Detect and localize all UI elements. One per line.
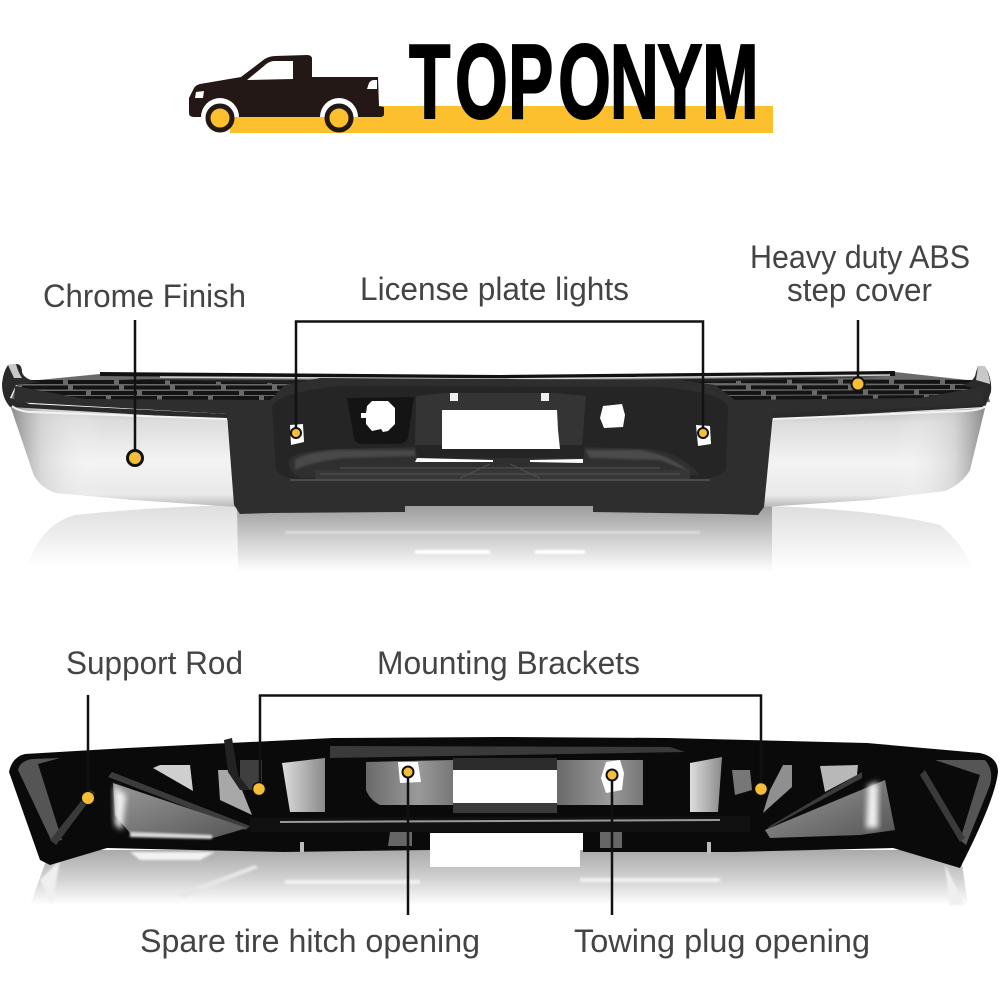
label: Heavy duty ABS step cover: Heavy duty ABS bbox=[750, 239, 970, 275]
cap rail right bbox=[768, 366, 991, 419]
plate window bbox=[453, 770, 557, 803]
plate slot highlights bbox=[415, 458, 583, 463]
label: Support Rod: Support Rod bbox=[66, 645, 243, 681]
label: Spare tire hitch opening: Spare tire hitch opening bbox=[140, 923, 480, 959]
label: License plate lights: License plate lights bbox=[360, 271, 629, 307]
callout: Support Rod marker bbox=[82, 695, 94, 804]
left socket opening bbox=[361, 401, 395, 432]
center body bbox=[227, 382, 773, 515]
callout: Towing plug marker bbox=[606, 770, 618, 915]
label: Heavy duty ABS step cover bbox=[750, 239, 970, 308]
panels left bbox=[113, 738, 325, 839]
white plate gap bbox=[430, 833, 580, 867]
photo: rear bumper back view bbox=[9, 737, 998, 868]
callout: step cover marker bbox=[852, 320, 864, 390]
logo yellow bar bbox=[228, 106, 773, 133]
callout: Mounting Brackets bracket bbox=[252, 696, 768, 796]
left plug hole bbox=[398, 762, 421, 783]
photo: rear bumper front view bbox=[2, 364, 991, 515]
callout: Spare tire hitch marker bbox=[402, 766, 414, 915]
bumper reflection: front view bbox=[28, 503, 972, 572]
right socket opening bbox=[600, 404, 625, 428]
license plate opening bbox=[442, 410, 560, 449]
right plug hole bbox=[601, 760, 624, 793]
step pad bbox=[10, 371, 990, 412]
tip highlights bbox=[8, 364, 990, 384]
icon: pickup truck bbox=[189, 55, 390, 139]
frame bbox=[9, 737, 998, 868]
rims bbox=[18, 758, 991, 845]
rail bbox=[250, 816, 750, 832]
cap rail left bbox=[2, 364, 232, 420]
struts bbox=[108, 772, 862, 830]
label: Towing plug opening: Towing plug opening bbox=[574, 923, 870, 959]
tabs bbox=[450, 393, 549, 401]
label: Mounting Brackets: Mounting Brackets bbox=[377, 645, 640, 681]
label: Heavy duty ABS step cover: step cover bbox=[787, 272, 932, 308]
label: Chrome Finish: Chrome Finish bbox=[43, 278, 246, 314]
chrome end left bbox=[10, 405, 237, 507]
callout: Chrome Finish marker bbox=[128, 320, 142, 466]
chrome trim lines bbox=[12, 406, 985, 419]
bumper reflection: rear view bbox=[30, 850, 968, 905]
lower brackets bbox=[300, 842, 711, 855]
chrome end right bbox=[763, 408, 985, 507]
center panel bbox=[330, 746, 685, 813]
logo: TOPONYM bbox=[189, 22, 773, 141]
panels right bbox=[690, 757, 895, 838]
step front band bbox=[14, 378, 985, 414]
logo wordmark: TOPONYM bbox=[409, 22, 759, 141]
callout: License plate lights bracket bbox=[291, 322, 708, 438]
light openings bbox=[290, 424, 711, 446]
